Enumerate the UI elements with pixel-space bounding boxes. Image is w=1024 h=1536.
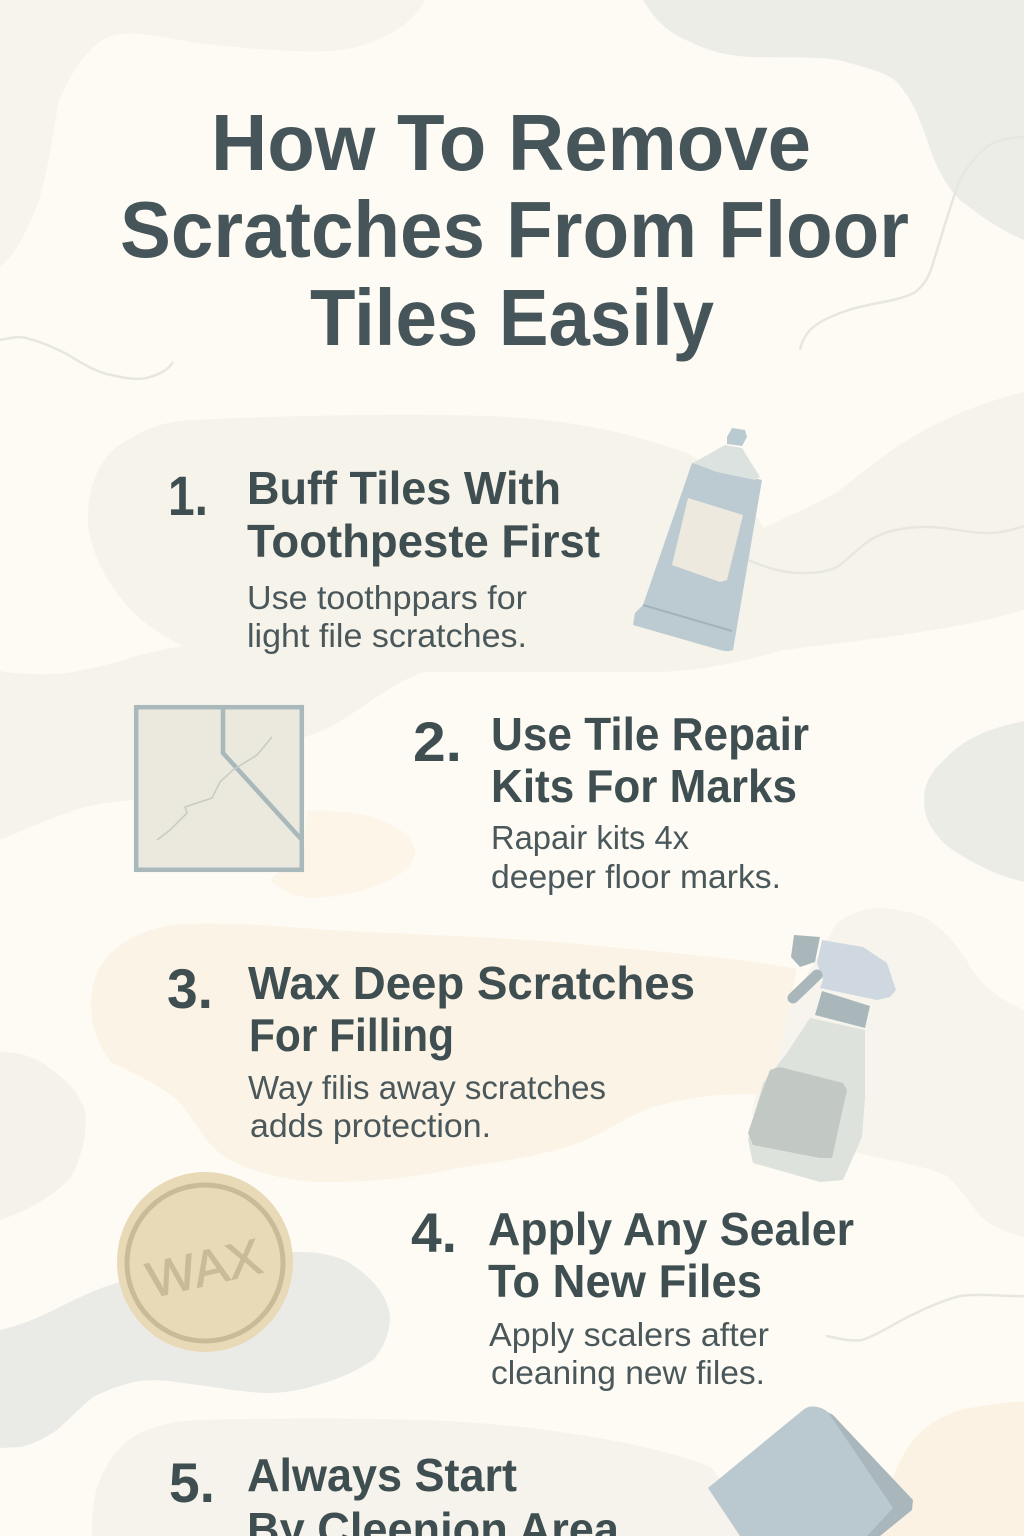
step 2: Rapair kits 4x [491, 819, 689, 856]
step 4: cleaning new files. [491, 1354, 765, 1391]
step 4: Apply Any Sealer [488, 1203, 854, 1255]
icon: wax disc [117, 1172, 293, 1352]
step 1: Toothpeste First [247, 515, 600, 567]
step 5 [169, 1449, 619, 1536]
step 5: Always Start [247, 1449, 517, 1501]
step 2: 2. [413, 710, 462, 773]
step 4: To New Files [488, 1255, 762, 1307]
icon: toothpaste tube [633, 428, 762, 651]
step 5: 5. [169, 1451, 215, 1514]
icon: wax disc: WAX [141, 1228, 267, 1309]
step 4: 4. [411, 1201, 457, 1264]
step 4: Apply scalers after [489, 1316, 769, 1353]
step 2: Kits For Marks [491, 760, 797, 812]
step 1 [168, 462, 600, 654]
step 4 [411, 1201, 854, 1391]
step 3: 3. [167, 957, 213, 1020]
title [120, 98, 909, 362]
step 2: Use Tile Repair [491, 708, 809, 760]
step 3: Wax Deep Scratches [248, 957, 695, 1009]
step 3 [167, 957, 695, 1144]
step 2 [413, 708, 809, 895]
step 3: Way filis away scratches [248, 1069, 606, 1106]
title: How To Remove [211, 98, 811, 187]
step 2: deeper floor marks. [491, 858, 781, 895]
step 1: Use toothppars for [247, 579, 527, 616]
step 1: light file scratches. [247, 617, 527, 654]
step 1: 1. [168, 464, 208, 527]
step 3: For Filling [249, 1009, 454, 1061]
step 3: adds protection. [250, 1107, 491, 1144]
step 1: Buff Tiles With [247, 462, 561, 514]
title: Scratches From Floor [120, 185, 909, 274]
icon: sponge [708, 1406, 913, 1536]
icon: cracked tile [136, 707, 302, 870]
icon: spray bottle [748, 935, 896, 1182]
title: Tiles Easily [310, 273, 714, 362]
